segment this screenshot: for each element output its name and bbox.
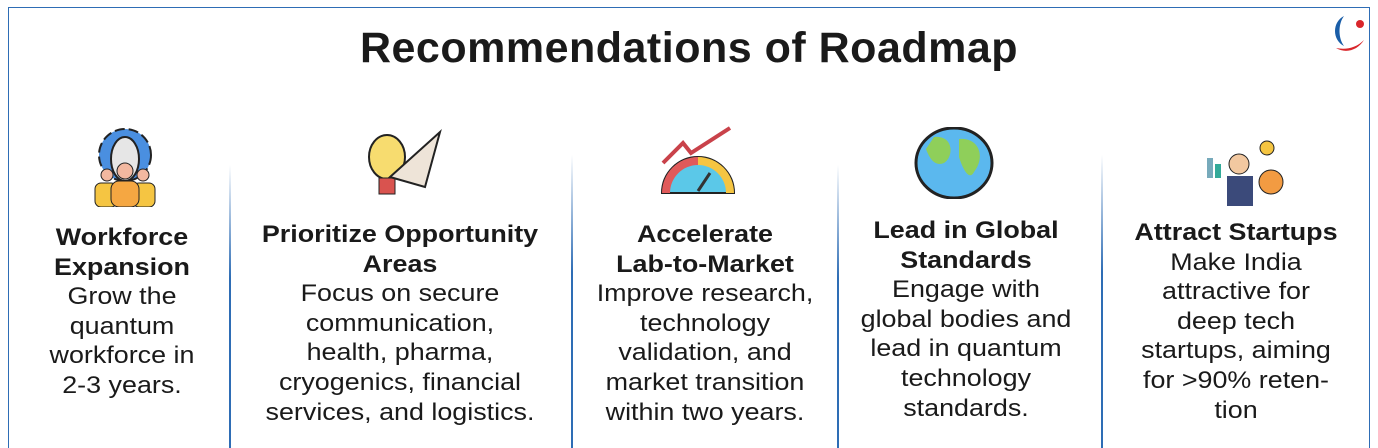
column 5: tion: [1214, 397, 1258, 424]
title: Recommendations of Roadmap: [360, 24, 1018, 72]
column 4: standards.: [903, 395, 1029, 422]
column 3: technology: [640, 310, 770, 337]
column 4: Standards: [900, 247, 1032, 274]
column 2: Focus on secure: [301, 280, 499, 307]
column 3: validation, and: [618, 339, 792, 366]
column 5: startups, aiming: [1141, 337, 1331, 364]
column 2: Prioritize Opportunity: [262, 221, 538, 248]
column 2: health, pharma,: [307, 339, 493, 366]
column 1: 2-3 years.: [62, 372, 182, 399]
column 1: Grow the: [67, 283, 177, 310]
column 2: Areas: [363, 251, 437, 278]
column 3: Accelerate: [637, 221, 773, 248]
column 2: [262, 221, 538, 426]
column 4: [861, 217, 1071, 422]
column 1: [50, 224, 194, 399]
column 1: Expansion: [54, 254, 190, 281]
column 3: market transition: [606, 369, 804, 396]
column 4: Engage with: [892, 276, 1040, 303]
column 4: lead in quantum: [870, 335, 1062, 362]
column 5: [1134, 219, 1338, 424]
column 3: Improve research,: [597, 280, 813, 307]
column 5: Make India: [1170, 249, 1302, 276]
icon: workforce: [94, 128, 156, 207]
column 3: [597, 221, 813, 426]
column 5: deep tech: [1177, 308, 1295, 335]
column 4: technology: [901, 365, 1031, 392]
column 4: Lead in Global: [873, 217, 1059, 244]
column 2: cryogenics, financial: [279, 369, 521, 396]
column 5: attractive for: [1162, 278, 1310, 305]
column 1: workforce in: [50, 342, 194, 369]
column 5: Attract Startups: [1134, 219, 1338, 246]
column 3: within two years.: [606, 399, 804, 426]
icon: globe: [914, 127, 994, 199]
icon: bulb and plane: [368, 129, 442, 194]
column 4: global bodies and: [861, 306, 1071, 333]
column 1: Workforce: [56, 224, 188, 251]
icon: speedometer: [661, 126, 735, 194]
column 2: services, and logistics.: [266, 399, 534, 426]
column 5: for >90% reten-: [1143, 367, 1329, 394]
column 2: communication,: [306, 310, 494, 337]
column 1: quantum: [70, 313, 174, 340]
logo: [1335, 16, 1364, 51]
column 3: Lab-to-Market: [616, 251, 794, 278]
icon: startup: [1207, 140, 1284, 206]
